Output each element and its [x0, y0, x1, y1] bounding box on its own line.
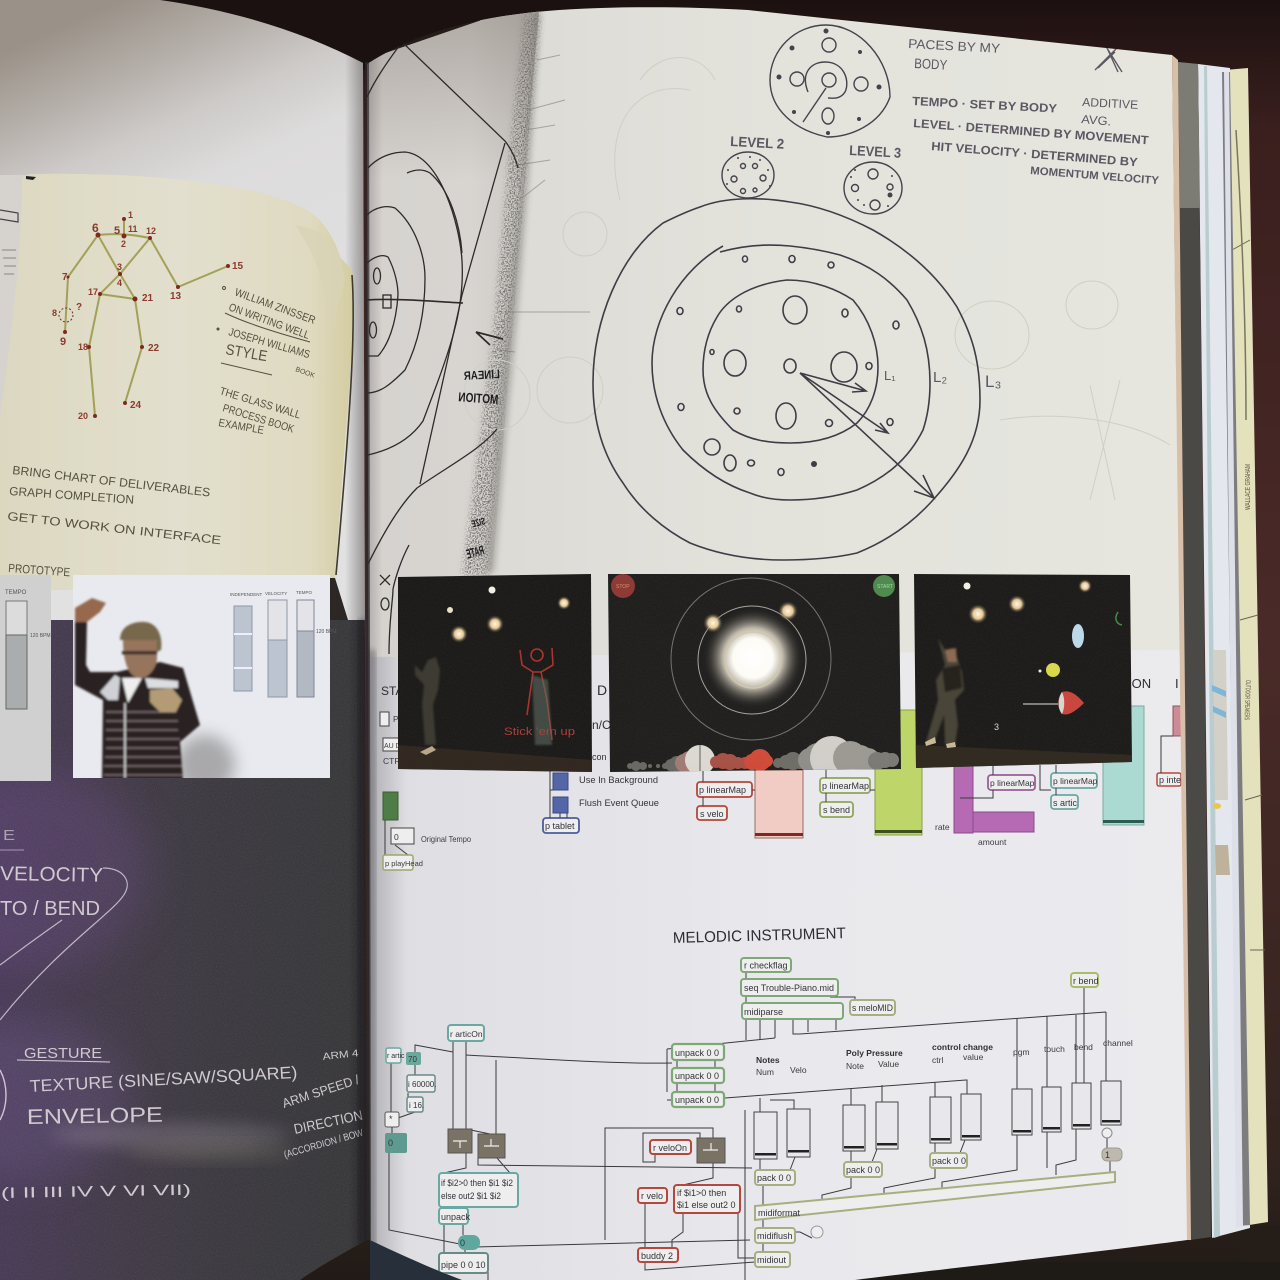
notebook page: skeleton and notes [0, 174, 353, 590]
orange fore edge [1172, 55, 1191, 1240]
rate and amount: amount [978, 837, 1007, 847]
slider labels: Note [846, 1061, 864, 1071]
photo: dancer with stick figure overlay [398, 574, 592, 775]
stop button [611, 574, 635, 598]
pack boxes: pack 0 0 [932, 1156, 966, 1166]
upper white page [0, 0, 367, 640]
articulation chain: pipe 0 0 10 [441, 1260, 486, 1270]
lower white patch page [365, 650, 1200, 1280]
handwritten notes [908, 36, 1160, 187]
articulation chain: if $i2>0 then $i1 $i2 [441, 1178, 513, 1188]
dancer [415, 657, 440, 745]
skeleton diagram: 11 [128, 224, 138, 234]
articulation chain: i 16. [409, 1101, 424, 1110]
artic mapping: s artic [1053, 798, 1078, 808]
sketch paper right of fold [480, 0, 1200, 670]
level 3 sketch: LEVEL 3 [849, 142, 902, 161]
section headings: con [592, 752, 607, 762]
raised hand [75, 598, 106, 622]
chalk writing: ARM 4 [322, 1048, 360, 1063]
tablet toggles: p tablet [545, 821, 575, 831]
unpack boxes: unpack 0 0 [675, 1071, 719, 1081]
slider labels: bend [1074, 1042, 1093, 1052]
reading notes: PROCESS BOOK [221, 402, 296, 436]
articulation chain: else out2 $i1 $i2 [441, 1191, 501, 1201]
sketched level bars: VELOCITY [265, 591, 287, 596]
seq and midiparse boxes: r bend [1073, 976, 1099, 986]
chalk writing: GESTURE [24, 1045, 102, 1062]
main level diagram L1 L2 L3 [593, 199, 1001, 560]
section headings: D [597, 682, 607, 698]
bend mapping [820, 710, 922, 835]
rate and amount: p linearMap [990, 778, 1035, 788]
skeleton diagram: 5 [114, 225, 120, 237]
handwritten notes: ADDITIVE [1082, 95, 1138, 112]
section headings [381, 676, 1179, 762]
faint pencil ghosts [464, 58, 1170, 500]
to do list: GRAPH COMPLETION [9, 484, 134, 507]
velocity gate objects: if $i1>0 then [677, 1188, 726, 1198]
photo: performer with coloured bubbles: 3 [994, 722, 999, 732]
pale page edges [1198, 64, 1250, 1238]
slider labels: ctrl [932, 1055, 943, 1065]
rate and amount [935, 765, 1035, 847]
articulation chain: 0 [460, 1238, 465, 1248]
artic mapping: p linearMap [1053, 776, 1098, 786]
performer [926, 638, 964, 745]
chalk writing: TEXTURE (SINE/SAW/SQUARE) [29, 1063, 298, 1096]
reading notes: EXAMPLE [217, 417, 265, 437]
mirrored sketch notes: MOTION [458, 389, 499, 407]
velocity gate objects: $i1 else out2 0 [677, 1200, 736, 1210]
articulation chain: * [389, 1114, 393, 1124]
melodic instrument patch [385, 925, 1133, 1280]
reading notes: BOOK [294, 366, 316, 380]
skeleton diagram: 21 [142, 293, 154, 304]
left sketch linework [367, 42, 518, 654]
reading notes: ON WRITING WELL [227, 302, 311, 342]
mirrored sketch notes: RATE [464, 542, 486, 562]
seq and midiparse boxes: r checkflag [744, 960, 788, 970]
level 2 sketch [722, 133, 785, 198]
section headings: n/C [592, 718, 611, 732]
seq and midiparse boxes: s meloMID [852, 1003, 893, 1013]
mirrored sketch notes: SIZE [470, 516, 487, 531]
skeleton diagram: 3 [117, 262, 122, 272]
start controls: Original Tempo [421, 834, 471, 844]
bend mapping: s bend [823, 805, 850, 815]
start button: START [877, 584, 893, 590]
photo: orbit interface with bubbles [608, 574, 901, 780]
velocity gate objects: buddy 2 [641, 1251, 673, 1261]
reading notes: JOSEPH WILLIAMS [227, 326, 311, 361]
stop button: STOP [616, 584, 630, 590]
skeleton diagram: 18 [78, 342, 88, 352]
bubble timeline [627, 736, 899, 780]
handwritten notes: BODY [914, 55, 948, 73]
tablet toggles [543, 770, 659, 833]
dark book strip [1178, 62, 1211, 1240]
interp fragment: p inter [1159, 775, 1184, 785]
mirrored sketch notes [458, 367, 500, 562]
skeleton diagram: 4 [117, 278, 122, 288]
handwritten notes: LEVEL · DETERMINED BY MOVEMENT [913, 116, 1150, 147]
start controls: CTRL [383, 756, 405, 766]
handwritten notes: TEMPO · SET BY BODY [912, 94, 1057, 116]
handwritten notes: AVG. [1081, 112, 1112, 129]
velocity mapping: s velo [700, 809, 724, 819]
left page [0, 0, 367, 1280]
reading notes [216, 286, 317, 437]
slider labels: pgm [1013, 1047, 1030, 1057]
to do list: PROTOTYPE [8, 561, 71, 579]
chalk writing: (ACCORDION / BOW [283, 1128, 365, 1161]
velocity mapping [697, 770, 803, 838]
skeleton diagram: ? [76, 302, 82, 313]
sliders [754, 1081, 1121, 1159]
previous sheet strip [0, 175, 28, 418]
level 1 small sketch [770, 25, 890, 137]
sketched level bars: INDEPENDENT [230, 592, 263, 597]
unpack boxes [672, 1044, 724, 1107]
yellow grid sheet: WALLACE GRAHAM [1245, 464, 1252, 510]
tablet toggles: Use In Background [579, 775, 658, 785]
skeleton diagram: 15 [232, 261, 244, 272]
pack boxes: pack 0 0 [757, 1173, 791, 1183]
start controls: p playHead [385, 859, 423, 868]
velocity gate objects [638, 1138, 740, 1262]
midi output boxes: midiout [757, 1255, 787, 1265]
chalk writing: ARM SPEED / [280, 1072, 361, 1111]
chalk writing: E [3, 827, 15, 844]
photo: conductor at whiteboard [73, 575, 337, 795]
pack boxes [755, 1153, 967, 1185]
sketched level bars: 120 BPM [316, 629, 337, 635]
artic mapping [1040, 706, 1144, 825]
slider labels: Num [756, 1067, 774, 1077]
slider labels [756, 1038, 1133, 1077]
handwritten notes: PACES BY MY [908, 36, 1001, 56]
section headings: ION [1128, 676, 1151, 691]
section headings: STA [381, 684, 403, 698]
channel toggle and button [1102, 1128, 1122, 1161]
seq and midiparse boxes [741, 958, 1099, 1019]
skeleton diagram: 17 [88, 287, 98, 297]
articulation chain: i 60000. [408, 1080, 436, 1089]
start button [873, 575, 895, 597]
skeleton diagram: 24 [130, 400, 142, 411]
bend mapping: p linearMap [822, 781, 869, 791]
pack boxes: pack 0 0 [846, 1165, 880, 1175]
chalk writing: (I II III IV V VI VII) [1, 1182, 191, 1202]
gutter shadow on lower page [366, 650, 376, 1270]
chalk writing: TO / BEND [0, 898, 100, 920]
red skeleton figure [520, 648, 553, 740]
overlay caption: Stick 'em up [504, 726, 575, 738]
seq and midiparse boxes: seq Trouble-Piano.mid [744, 983, 834, 993]
slider labels: Notes [756, 1055, 780, 1065]
midi output boxes: midiflush [757, 1231, 793, 1241]
slider labels: Velo [790, 1065, 807, 1075]
skeleton diagram: 6 [92, 221, 99, 235]
start controls: 0 [394, 832, 399, 842]
photo strip left: level bars: 120 BPM [30, 633, 51, 639]
reading notes: THE GLASS WALL [218, 385, 302, 421]
skeleton diagram: 13 [170, 291, 182, 302]
slider labels: touch [1044, 1044, 1065, 1054]
midi output boxes: midiformat [758, 1208, 801, 1218]
main level diagram L1 L2 L3: L₁ [884, 368, 896, 383]
start controls: P [393, 714, 399, 724]
to do list: GET TO WORK ON INTERFACE [7, 509, 222, 547]
dark notebook corner by gutter [330, 578, 348, 620]
tablet toggles: Flush Event Queue [579, 798, 659, 808]
fold shadow [462, 12, 590, 575]
articulation chain: 70 [408, 1055, 417, 1064]
start controls [380, 712, 471, 870]
slider labels: control change [932, 1042, 993, 1052]
articulation chain: r artic [387, 1053, 405, 1060]
page stack on right edge [1172, 55, 1268, 1240]
skeleton diagram: 22 [148, 343, 160, 354]
level 2 sketch: LEVEL 2 [730, 133, 785, 152]
skeleton diagram: 12 [146, 226, 156, 236]
articulation chain: unpack [441, 1212, 471, 1222]
chalk writing [0, 827, 365, 1202]
photo strip left: level bars: TEMPO [5, 590, 27, 596]
skeleton diagram: 9 [60, 336, 66, 348]
channel toggle and button: 1 [1105, 1150, 1110, 1160]
chalk writing: VELOCITY [0, 863, 103, 887]
velocity gate objects: r veloOn [653, 1143, 687, 1153]
skeleton diagram: 1 [128, 210, 133, 220]
seq and midiparse boxes: midiparse [744, 1007, 783, 1017]
articulation chain [385, 1025, 518, 1273]
to do list [7, 463, 222, 579]
velocity mapping: p linearMap [699, 785, 746, 795]
sketched level bars: TEMPO [296, 590, 313, 595]
level 3 sketch [844, 142, 902, 214]
articulation chain: 0 [388, 1138, 393, 1148]
interp fragment [1157, 706, 1184, 786]
hoodie body [75, 620, 200, 780]
articulation chain: r articOn [450, 1029, 483, 1039]
unpack boxes: unpack 0 0 [675, 1048, 719, 1058]
outer page shading [365, 62, 371, 1240]
slider labels: Value [878, 1059, 899, 1069]
skeleton diagram [52, 210, 244, 421]
main level diagram L1 L2 L3: L₂ [933, 369, 947, 386]
skeleton diagram: 8 [52, 308, 57, 318]
slider labels: Poly Pressure [846, 1048, 903, 1058]
chalk writing: ENVELOPE [27, 1104, 163, 1129]
main level diagram L1 L2 L3: L₃ [985, 372, 1001, 391]
unpack boxes: unpack 0 0 [675, 1095, 719, 1105]
photo strip left: level bars [0, 575, 51, 781]
right page [365, 0, 1200, 1280]
photo: performer with coloured bubbles [914, 574, 1134, 770]
reading notes: WILLIAM ZINSSER [233, 287, 317, 327]
handwritten notes: HIT VELOCITY · DETERMINED BY [931, 139, 1138, 169]
slider labels: channel [1103, 1038, 1133, 1048]
rate and amount: rate [935, 822, 950, 832]
folded sketch paper left of fold [365, 0, 540, 660]
midi output boxes [755, 1172, 1115, 1267]
reading notes: STYLE [224, 341, 269, 365]
face and hair [120, 622, 161, 652]
skeleton diagram: 20 [78, 411, 88, 421]
chalk writing: DIRECTION [292, 1107, 364, 1137]
hoodie stripes [104, 712, 182, 775]
handwritten notes: MOMENTUM VELOCITY [1030, 165, 1160, 187]
yellow grid sheet: OUTDOOR SPEAKERS [1243, 680, 1251, 720]
blurred fist [150, 688, 182, 712]
sketched level bars [230, 590, 337, 697]
dark chalkboard panel [0, 620, 367, 1280]
slider labels: value [963, 1052, 984, 1062]
title: MELODIC INSTRUMENT [673, 925, 847, 947]
start controls: AU DL [384, 743, 405, 750]
skeleton diagram: 7 [62, 272, 68, 283]
to do list: BRING CHART OF DELIVERABLES [12, 463, 211, 500]
top Max patch fragments behind photos [380, 676, 1184, 870]
skeleton diagram: 2 [121, 239, 126, 249]
mirrored sketch notes: LINEAR [463, 367, 500, 383]
patch wires [389, 972, 1110, 1280]
section headings: I [1175, 676, 1179, 691]
velocity gate objects: r velo [641, 1191, 663, 1201]
yellow grid sheet [1225, 68, 1268, 1226]
